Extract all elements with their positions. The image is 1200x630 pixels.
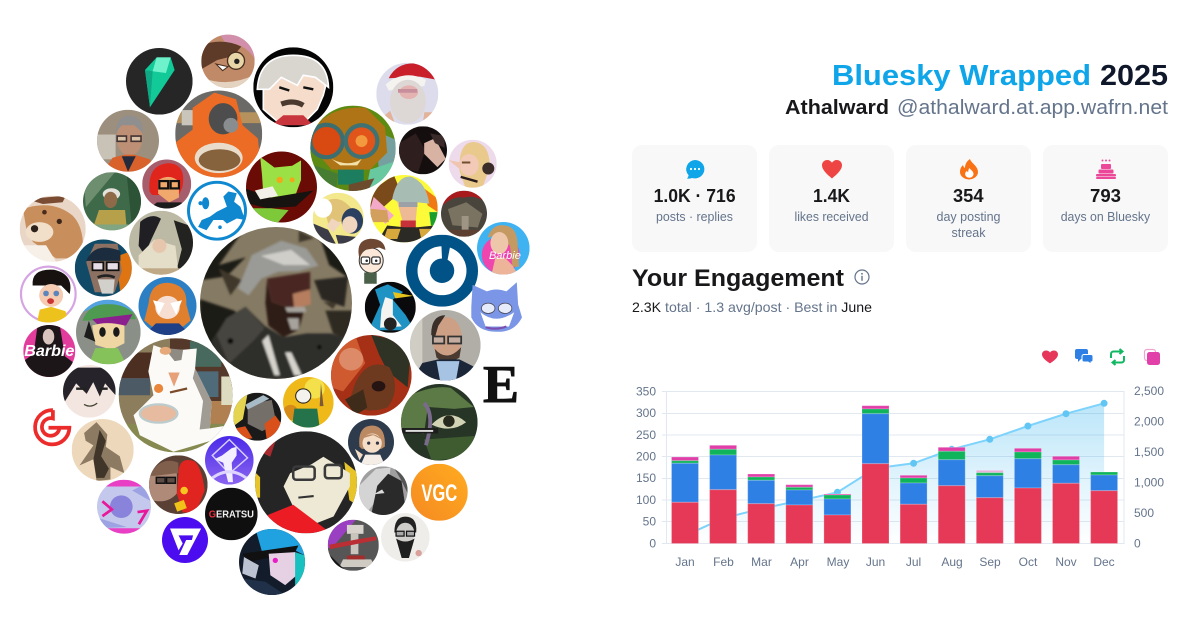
avatar: glitch purple art [97,480,151,534]
icon: legend repost [1111,349,1124,365]
month labels: Apr [790,555,809,569]
month labels: Dec [1093,555,1115,569]
right axis labels: 0 [1134,536,1141,550]
avatar: santa [376,63,438,125]
right axis labels [1134,384,1164,550]
avatar: eye art pendulum [401,384,478,461]
avatar: letter E [471,355,531,415]
bar: Apr [786,485,813,544]
avatar: europe map [187,181,247,241]
title: Bluesky Wrapped [832,60,1091,92]
bar: Jun [862,406,889,544]
avatar: dark hair woman hand [399,126,447,174]
month labels [675,555,1115,569]
chart grid [662,391,1124,544]
legend icons [1042,349,1160,365]
avatar: pink ring cartoon girl [20,266,77,322]
left axis labels: 200 [636,450,656,464]
stat label: posts · replies [656,210,733,224]
profile name and handle [785,97,1168,119]
avatar: Geratsu logo [205,488,258,540]
avatar: blue ring logo [406,235,478,307]
engagement summary: 2.3K total · 1.3 avg/post · Best in June [632,299,872,315]
icon: chat bubble [686,160,704,179]
avatar: green hat cartoon [76,300,141,364]
right axis labels: 1,500 [1134,445,1164,459]
icon: legend heart [1042,350,1058,364]
avatar: gundam char with pride [370,175,438,242]
avatar: black hair pale face [63,365,116,418]
bar: Dec [1091,472,1118,544]
avatar: older man with glasses [97,110,159,172]
bar: Sep [976,470,1003,544]
month labels: Mar [751,555,772,569]
avatar: penguin [365,282,416,333]
panel: posts and replies [632,145,757,252]
avatar: blue cat [471,282,522,332]
month labels: Nov [1055,555,1077,569]
avatar cluster [20,35,531,595]
avatar: G logo [33,408,72,446]
avatar: orange haired anime [138,277,196,335]
right axis labels: 2,500 [1134,384,1164,398]
right axis labels: 2,000 [1134,414,1164,428]
avatar: robot ROB [328,520,379,571]
profile name and handle: Athalward [785,97,889,119]
month labels: Oct [1019,555,1038,569]
stat value: 793 [1090,186,1121,206]
engagement heading: Your Engagement [632,265,844,292]
left axis labels: 50 [643,514,656,528]
right axis labels: 1,000 [1134,476,1164,490]
avatar: blue haired goth [239,529,305,595]
bar: May [824,494,851,544]
stat value: 1.0K · 716 [654,186,736,206]
left axis labels: 100 [636,493,656,507]
stat label line two: streak [952,226,986,240]
avatar: purple V logo [162,517,208,563]
avatar: theatre [441,191,487,237]
avatar: blue cap glasses beard [75,240,132,296]
stat value: 1.4K [813,186,850,206]
avatar: glasses anime black hair [255,431,357,533]
avatar: grey haired cartoon [253,47,333,127]
title: 2025 [1100,60,1168,92]
month labels: May [827,555,849,569]
avatar: red haired pixel girl [142,160,191,208]
icon: info [855,270,869,284]
avatar: barbie dark hair [23,325,75,377]
avatar: letter E: E [483,356,519,414]
avatar: VGC logo [411,464,468,521]
month labels: Sep [979,555,1001,569]
profile name and handle: @athalward.at.app.wafrn.net [897,97,1168,119]
month labels: Feb [713,555,734,569]
month labels: Jul [906,555,921,569]
avatar: white cat eating [119,338,233,452]
right axis labels: 500 [1134,506,1154,520]
avatar: dark haired anime in white [129,211,193,278]
month labels: Jun [866,555,885,569]
panel: days on Bluesky [1043,145,1168,252]
left axis labels: 300 [636,406,656,420]
stat value: 354 [953,186,984,206]
avatar: red toy and woman [149,455,208,514]
stat label: days on Bluesky [1061,210,1151,224]
cumulative line [685,403,1104,536]
left axis labels: 150 [636,471,656,485]
icon: cake [1096,160,1116,179]
bar: Oct [1014,448,1041,544]
month labels: Jan [675,555,695,569]
avatar: grey monochrome warrior [359,466,408,515]
bar: Jul [900,475,927,544]
icon: flame [960,159,978,180]
cumulative area [685,403,1104,544]
month labels: Aug [941,555,963,569]
bar: Mar [748,474,775,544]
bar: Aug [938,447,965,544]
avatar: cartoon man glasses [358,239,385,284]
avatar: screaming face [331,335,412,416]
stacked bars [672,406,1118,544]
avatar: blonde elf [449,140,497,188]
cumulative points [834,400,1108,496]
left axis labels: 350 [636,384,656,398]
avatar: anime duo [313,193,364,244]
avatar: psychonauts goggles [310,106,396,191]
avatar: black and white bearded man [381,513,430,562]
stat label: likes received [794,210,869,224]
avatar: emerald gem [126,48,193,115]
avatar: sepia bird art [72,419,134,481]
avatar: man in blue shirt [410,310,481,381]
engagement chart [636,384,1164,569]
avatar: main portrait [200,227,352,379]
icon: legend replies [1075,349,1093,364]
icon: legend quote [1144,350,1160,365]
bar: Nov [1052,456,1080,544]
panel: likes received [769,145,894,252]
stat label: day posting [936,210,1001,224]
avatar: anime girl peace sign [348,419,394,465]
avatar: green cat [246,152,317,222]
avatar: man in jungle [83,172,141,233]
avatar: girl with pink hat [201,35,255,88]
avatar: barbie blonde [477,222,530,275]
avatar: golden dog [20,196,86,262]
bar: Jan [672,457,698,544]
left axis labels: 0 [649,536,656,550]
icon: heart [822,160,842,178]
avatar: comic man [233,393,281,441]
left axis labels [636,384,656,550]
avatar: purple deer logo [205,436,254,485]
bar: Feb [710,445,737,544]
avatar: orange hoodie gas mask [175,90,262,178]
panel: day posting streak [906,145,1031,252]
left axis labels: 250 [636,428,656,442]
avatar: skeleton on fire [283,377,334,428]
